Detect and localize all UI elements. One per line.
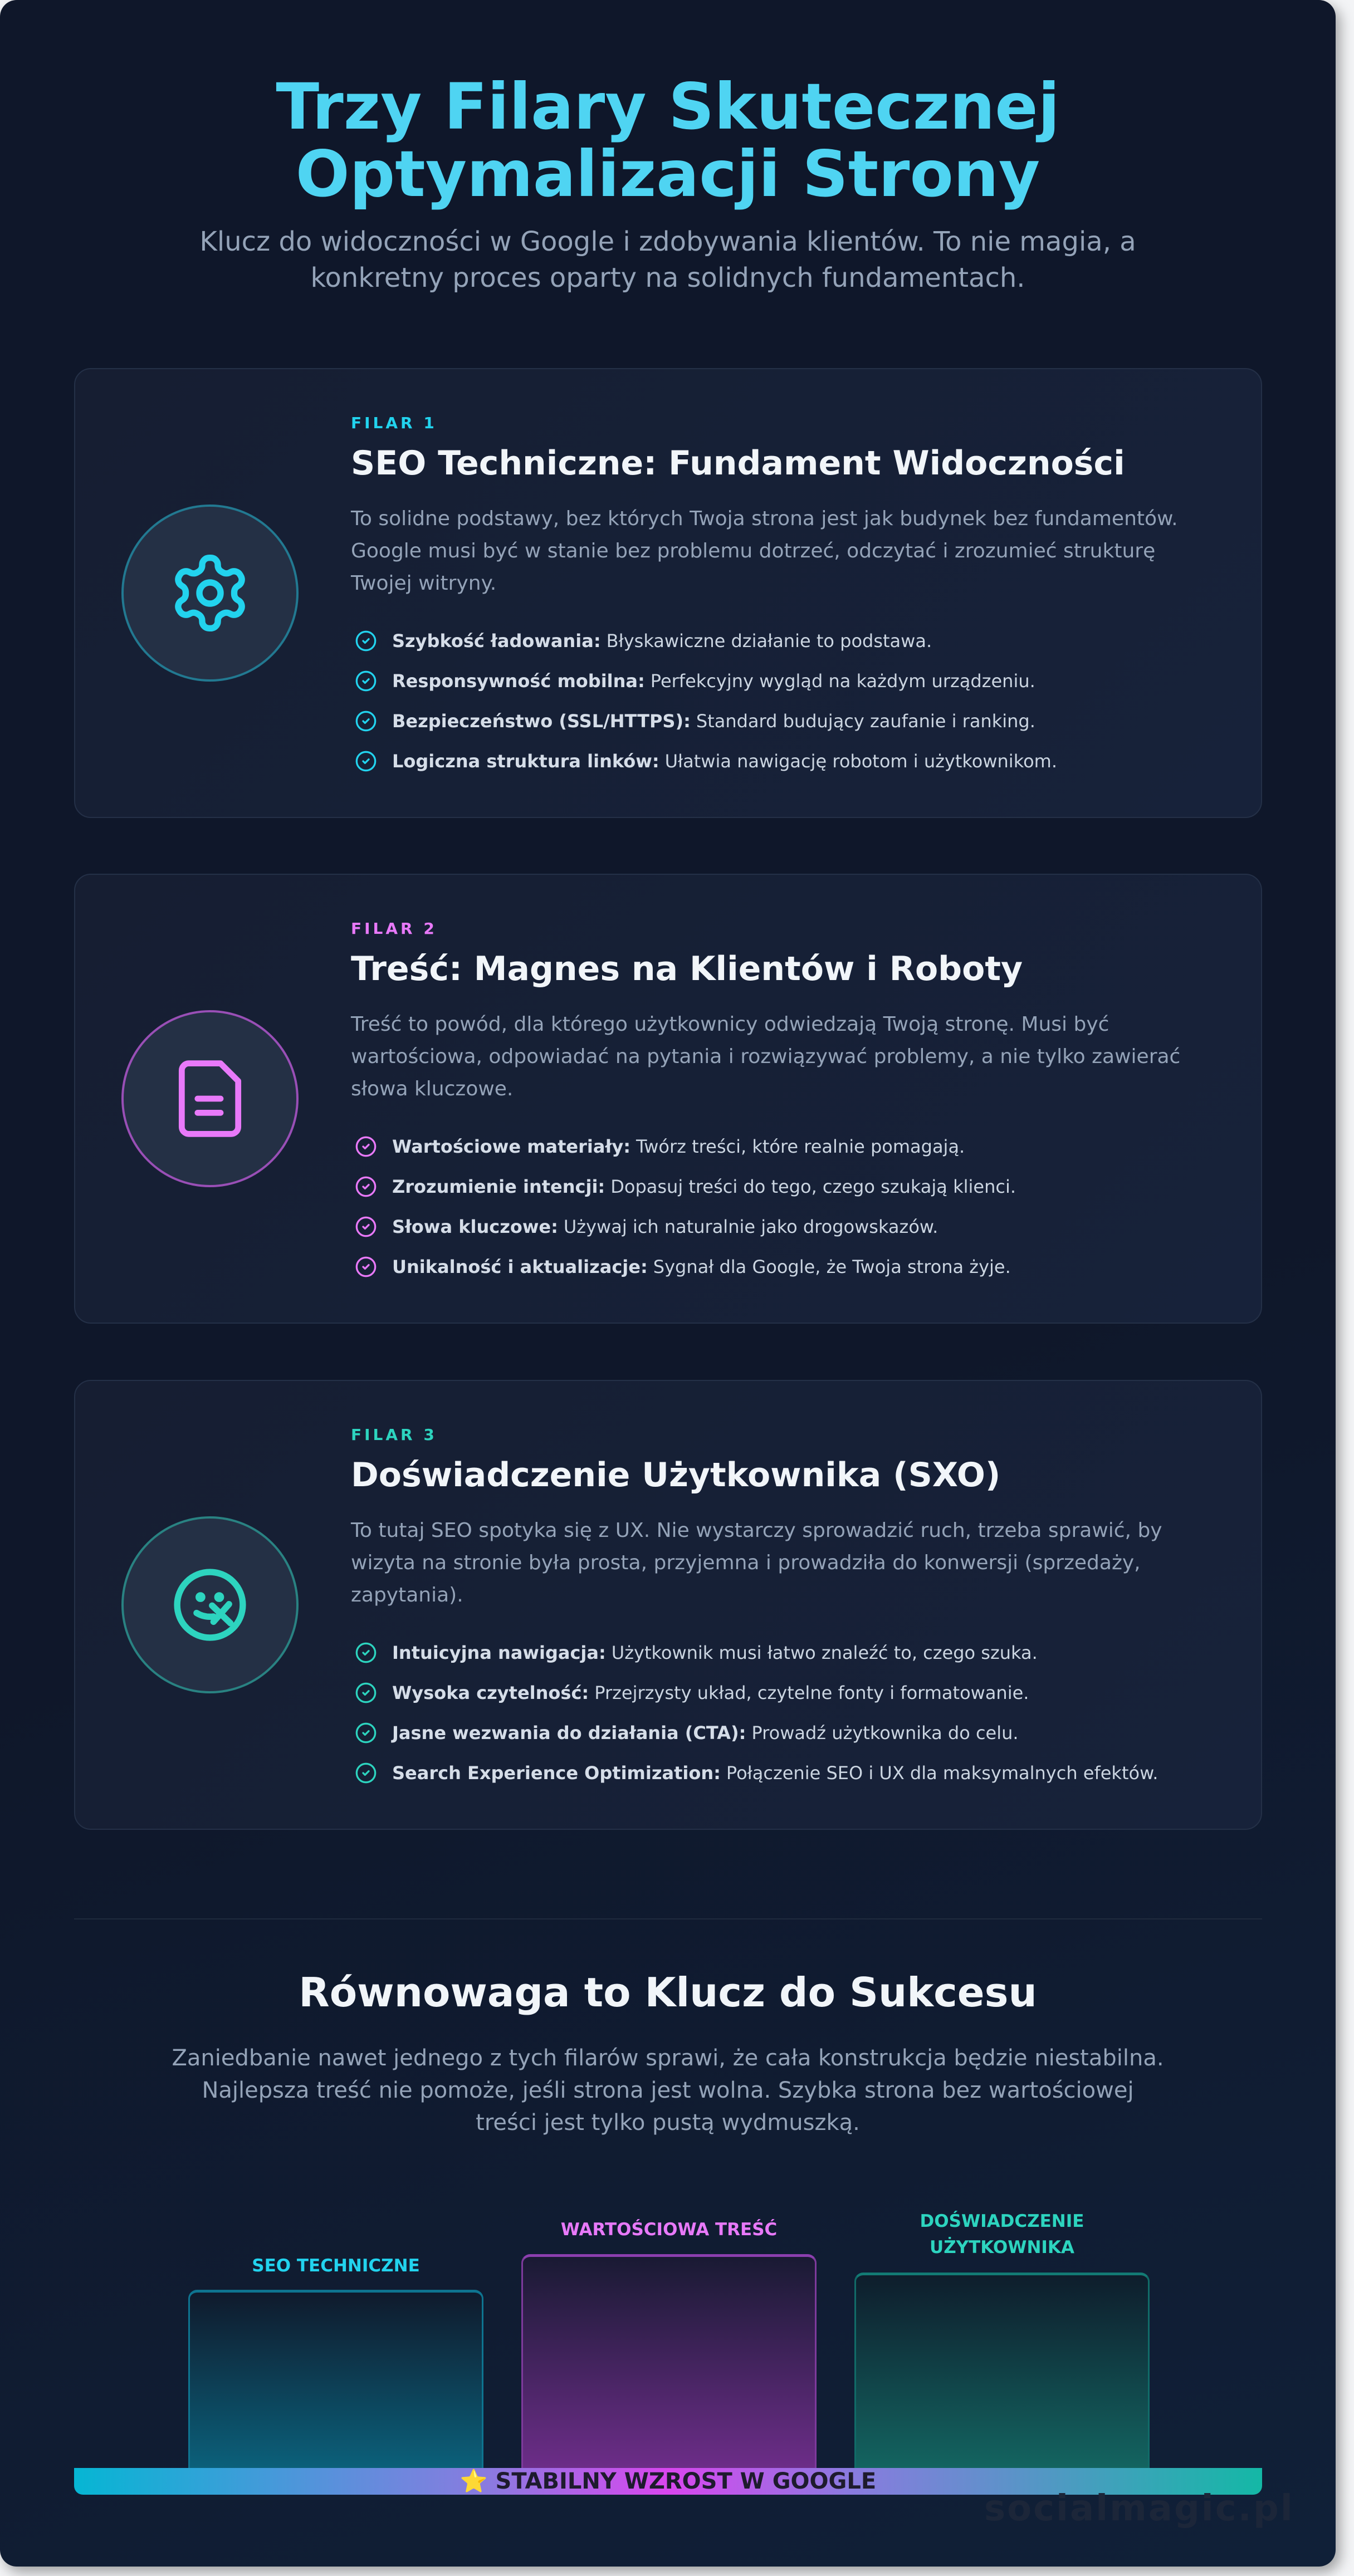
- checklist: Perfekcyjny wygląd na każdym urządzeniu.: [651, 670, 1035, 692]
- label: tresc: WARTOŚCIOWA TREŚĆ: [561, 2220, 777, 2240]
- checklist: Search Experience Optimization:: [392, 1762, 721, 1784]
- checklist: Wartościowe materiały:: [392, 1136, 630, 1157]
- icon: gear: [121, 505, 299, 682]
- heading: SEO Techniczne: Fundament Widoczności: [351, 444, 1125, 483]
- chart: pillars: [74, 2211, 1262, 2495]
- heading: Treść: Magnes na Klientów i Roboty: [351, 949, 1023, 988]
- checklist: Błyskawiczne działanie to podstawa.: [607, 630, 932, 652]
- watermark: socialmagic.pl: [984, 2488, 1294, 2529]
- checklist: Logiczna struktura linków:: [392, 751, 659, 772]
- checklist: [355, 1642, 1158, 1784]
- heading: Doświadczenie Użytkownika (SXO): [351, 1456, 1000, 1495]
- checklist: Bezpieczeństwo (SSL/HTTPS):: [392, 711, 691, 732]
- checklist: Sygnał dla Google, że Twoja strona żyje.: [653, 1256, 1011, 1277]
- checklist: Używaj ich naturalnie jako drogowskazów.: [564, 1216, 938, 1237]
- description: To tutaj SEO spotyka się z UX. Nie wystarczy sprowadzić ruch, trzeba sprawić, by wizyta na stronie była prosta, przyjemna i prowadziła do konwersji (sprzedaży, zapytania).: [351, 1519, 1162, 1607]
- checklist: Jasne wezwania do działania (CTA):: [392, 1722, 746, 1744]
- panel: filar 1: [74, 368, 1262, 818]
- checklist: Przejrzysty układ, czytelne fonty i formatowanie.: [594, 1682, 1029, 1703]
- checklist: Dopasuj treści do tego, czego szukają klienci.: [610, 1176, 1016, 1197]
- checklist: Wysoka czytelność:: [392, 1682, 589, 1703]
- checklist: Unikalność i aktualizacje:: [392, 1256, 648, 1277]
- checklist: Prowadź użytkownika do celu.: [751, 1722, 1019, 1744]
- panel: filar 2: [74, 874, 1262, 1324]
- panel: filar 3: [74, 1380, 1262, 1830]
- checklist: Twórz treści, które realnie pomagają.: [636, 1136, 965, 1157]
- subtitle: Klucz do widoczności w Google i zdobywania klientów. To nie magia, a konkretny proces oparty na solidnych fundamentach.: [199, 226, 1136, 293]
- checklist: Połączenie SEO i UX dla maksymalnych efektów.: [726, 1762, 1158, 1784]
- checklist: [355, 630, 1057, 772]
- checklist: Ułatwia nawigację robotom i użytkownikom.: [665, 751, 1057, 772]
- label: filar 2: FILAR 2: [351, 919, 437, 938]
- bar: seo: [188, 2290, 483, 2468]
- label: seo techniczne: SEO TECHNICZNE: [252, 2256, 420, 2276]
- checklist: Słowa kluczowe:: [392, 1216, 558, 1237]
- base: stabilny wzrost: [74, 2468, 1262, 2495]
- label: filar 1: FILAR 1: [351, 414, 437, 432]
- description: Treść to powód, dla którego użytkownicy odwiedzają Twoją stronę. Musi być wartościowa, odpowiadać na pytania i rozwiązywać problemy, a nie tylko zawierać słowa kluczowe.: [351, 1013, 1180, 1100]
- bar: ux: [854, 2273, 1150, 2468]
- checklist: [355, 1136, 1016, 1277]
- title: Optymalizacji Strony: [296, 137, 1040, 211]
- checklist: Szybkość ładowania:: [392, 630, 601, 652]
- bar: tresc: [521, 2254, 817, 2468]
- label: ux: [920, 2211, 1084, 2257]
- checklist: Intuicyjna nawigacja:: [392, 1642, 606, 1663]
- icon: smile: [121, 1516, 299, 1693]
- checklist: Standard budujący zaufanie i ranking.: [696, 711, 1035, 732]
- label: ux: DOŚWIADCZENIE: [920, 2211, 1084, 2231]
- checklist: Użytkownik musi łatwo znaleźć to, czego szuka.: [612, 1642, 1038, 1663]
- title: [276, 70, 1060, 211]
- icon: document: [121, 1010, 299, 1187]
- label: ux: UŻYTKOWNIKA: [930, 2237, 1074, 2257]
- section heading: Równowaga to Klucz do Sukcesu: [299, 1969, 1037, 2016]
- base: stabilny wzrost: ⭐ STABILNY WZROST W GOOGLE: [460, 2469, 876, 2494]
- section text: Zaniedbanie nawet jednego z tych filarów sprawi, że cała konstrukcja będzie niestabilna. Najlepsza treść nie pomoże, jeśli strona jest wolna. Szybka strona bez wartościowej treści jest tylko pustą wydmuszką.: [172, 2045, 1164, 2136]
- checklist: Zrozumienie intencji:: [392, 1176, 605, 1197]
- checklist: Responsywność mobilna:: [392, 670, 645, 692]
- title: Trzy Filary Skutecznej: [276, 70, 1060, 144]
- label: filar 3: FILAR 3: [351, 1426, 437, 1444]
- description: To solidne podstawy, bez których Twoja strona jest jak budynek bez fundamentów. Google musi być w stanie bez problemu dotrzeć, odczytać i zrozumieć strukturę Twojej witryny.: [351, 507, 1178, 595]
